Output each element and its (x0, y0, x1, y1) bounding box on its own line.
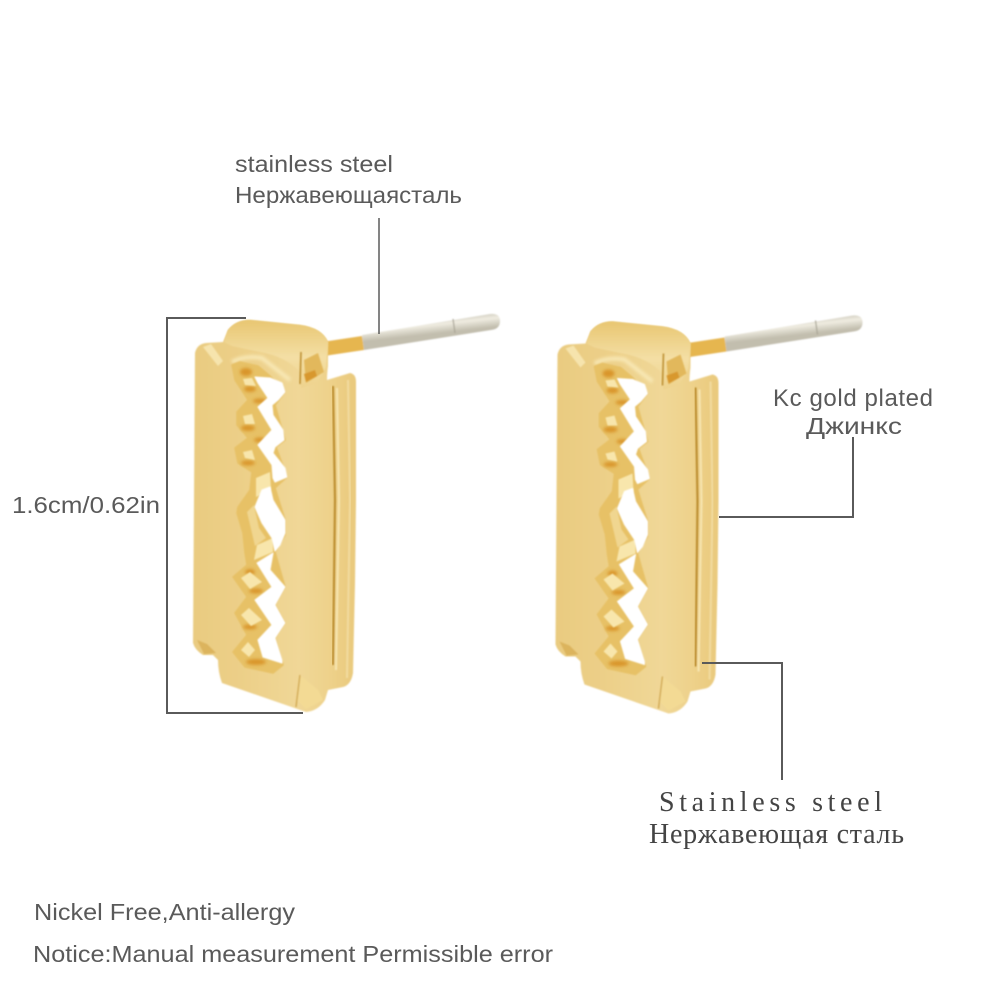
callout text: stainless steel (235, 151, 462, 208)
callout text: body stainless steel: Нержавеющая сталь (649, 819, 904, 850)
dimension label: 1.6cm/0.62in (12, 492, 160, 518)
corner facet bottom-right (296, 675, 323, 709)
corner facet top-left (203, 344, 223, 366)
right edge groove (333, 380, 350, 678)
tab crease and socket (300, 352, 324, 384)
corner facet bottom-left (197, 640, 216, 654)
note: measurement notice: Notice:Manual measurement Permissible error (33, 941, 553, 967)
note: nickel free: Nickel Free,Anti-allergy (34, 899, 296, 925)
earring: left razor blade stud (193, 314, 500, 712)
earring: right razor blade stud (556, 315, 862, 714)
callout line: plating (719, 437, 853, 517)
callout text: stainless steel: stainless steel (235, 151, 393, 177)
teeth: bright highlights (241, 378, 273, 657)
callout line: pin material (378, 218, 380, 334)
top tab highlight (224, 320, 328, 388)
callout line: body material (702, 663, 782, 780)
dimension bracket (167, 318, 303, 713)
window rim highlight (232, 357, 290, 380)
blade openings (255, 377, 287, 663)
callout text: body stainless steel: Stainless steel (659, 787, 882, 818)
teeth: gold window inner (232, 362, 287, 673)
callout text: gold plated: Джинкс (806, 413, 902, 439)
blade body (193, 320, 356, 712)
callout text: gold plated (773, 385, 933, 439)
teeth: orange shadows (240, 368, 267, 665)
callout text: body stainless steel (649, 787, 904, 850)
callout text: gold plated: Kc gold plated (773, 385, 933, 412)
pin post (322, 314, 500, 356)
callout text: stainless steel: Нержавеющаясталь (235, 182, 462, 208)
